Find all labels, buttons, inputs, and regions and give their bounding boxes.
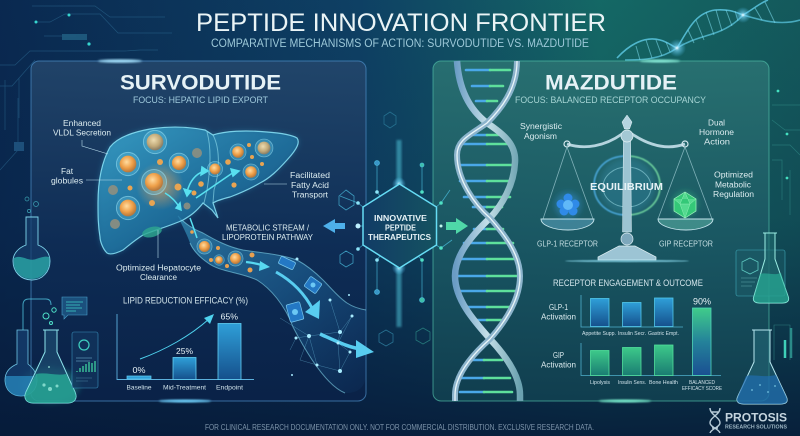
label: enhanced vldl secretion: VLDL Secretion	[53, 128, 111, 138]
logo: protosis research solutions	[710, 408, 788, 433]
hexagon vertical glow	[392, 140, 406, 327]
chart title: LIPID REDUCTION EFFICACY (%)	[123, 296, 248, 306]
glp-1 bar labels: Insulin Secr.	[618, 331, 646, 337]
hepatic inner glow	[136, 162, 184, 210]
label: facilitated fatty acid transport	[264, 171, 330, 200]
stream network nodes	[280, 258, 354, 376]
lower flask	[737, 330, 787, 404]
gallbladder	[141, 225, 163, 239]
glp-1 bar labels: Gastric Empt.	[648, 331, 679, 337]
flask glow	[20, 367, 80, 403]
panel top glow	[640, 60, 680, 62]
label: optimized metabolic regulation: Optimized	[714, 170, 753, 180]
back flask	[5, 330, 37, 396]
panel top glow	[98, 59, 142, 63]
dna rungs	[457, 70, 517, 392]
stream flow arrows	[246, 261, 374, 358]
row label: glp-1 activation: GLP-1	[549, 303, 568, 312]
central hexagon callout: THERAPEUTICS	[368, 232, 431, 242]
transport arrows in liver	[165, 167, 239, 238]
hexagon circuit traces	[339, 112, 452, 346]
text: equilibrium: EQUILIBRIUM	[590, 181, 663, 193]
chart axes	[117, 314, 254, 380]
label: hepatocyte clearance: Clearance	[140, 273, 178, 282]
main title: PEPTIDE INNOVATION FRONTIER	[196, 9, 606, 37]
stream lipoprotein globules	[190, 230, 254, 272]
label: optimized metabolic regulation: Regulation	[713, 190, 754, 199]
bar: endpoint 65%: Endpoint	[216, 384, 243, 392]
balance scale	[541, 115, 713, 262]
label: facilitated fatty acid transport: Facilitated	[290, 171, 330, 180]
bar: mid-treatment 25%: Mid-Treatment	[163, 384, 206, 392]
fat globules	[108, 130, 273, 229]
label: fat globules: globules	[51, 176, 83, 186]
survodutide labels	[51, 119, 330, 282]
bar: mid-treatment 25%	[163, 346, 206, 392]
glp-1 bar labels: Appetite Supp.	[582, 331, 616, 337]
central hexagon callout	[339, 112, 452, 346]
dna strand a	[455, 61, 520, 401]
dna strand b	[455, 61, 520, 401]
label: fat globules: Fat	[61, 167, 74, 176]
logo tagline: RESEARCH SOLUTIONS	[725, 424, 788, 430]
stream receptor cards	[278, 256, 322, 323]
bar: balanced efficacy score 90%: BALANCED	[689, 380, 715, 386]
liver lobe division	[204, 132, 218, 203]
label: hepatocyte clearance	[116, 230, 202, 282]
bar: baseline 0%	[126, 365, 152, 392]
connecting tube	[23, 299, 51, 330]
note screen	[62, 297, 87, 319]
row label: gip activation: Activation	[541, 360, 576, 370]
panel bottom glow	[159, 400, 211, 402]
icon: green gip crystal	[672, 191, 698, 218]
small data bars	[774, 325, 791, 360]
heading: survodutide: SURVODUTIDE	[120, 72, 281, 94]
gip bars	[590, 345, 673, 376]
footer disclaimer: FOR CLINICAL RESEARCH DOCUMENTATION ONLY. NOT FOR COMMERCIAL DISTRIBUTION. EXCLUSIVE RESEARCH DATA.	[205, 423, 594, 432]
circuit decoration top left	[0, 6, 172, 170]
chart title: RECEPTOR ENGAGEMENT & OUTCOME	[553, 278, 703, 288]
label: dual hormone action: Hormone	[699, 128, 735, 137]
label: gip receptor: GIP RECEPTOR	[659, 238, 713, 248]
erlenmeyer flask	[25, 330, 76, 403]
bubbles above round flask	[25, 197, 38, 213]
bar: baseline 0%: Baseline	[126, 384, 152, 392]
liver outer glow	[98, 127, 298, 254]
hexagon shape	[363, 184, 436, 268]
data panel	[736, 250, 785, 296]
round flask	[13, 217, 50, 280]
bar: baseline 0%: 0%	[132, 365, 146, 375]
bar: mid-treatment 25%: 25%	[176, 346, 193, 356]
data tablet	[72, 332, 98, 388]
upper flask	[753, 233, 789, 303]
hexagon text: INNOVATIVE	[374, 213, 427, 223]
gip axes	[581, 343, 721, 376]
label: metabolic stream	[222, 224, 314, 242]
logo wordmark: PROTOSIS	[725, 412, 787, 424]
scale finial	[622, 115, 632, 129]
mazdutide labels	[520, 118, 754, 248]
bubbles	[43, 308, 56, 324]
bar: endpoint 65%	[216, 312, 243, 392]
circuit decoration right	[772, 90, 800, 215]
gip bar labels: Insulin Sens.	[618, 380, 646, 386]
liver illustration	[98, 127, 298, 254]
glp-1 axes	[581, 295, 683, 327]
lab glassware right	[736, 233, 791, 404]
label: facilitated fatty acid transport: Fatty Acid	[291, 181, 329, 190]
label: enhanced vldl secretion: Enhanced	[63, 119, 101, 128]
label: enhanced vldl secretion	[53, 119, 111, 154]
arrow: toward survodutide	[323, 219, 360, 233]
label: hepatocyte clearance: Optimized Hepatocyte	[116, 264, 202, 272]
chart: lipid reduction efficacy	[117, 296, 254, 392]
bar: balanced efficacy score 90%	[682, 296, 722, 392]
logo dna icon	[710, 408, 720, 433]
gip bar labels	[590, 380, 678, 386]
scale beam	[567, 134, 685, 147]
dna highlight	[455, 61, 520, 401]
subheading: receptor focus: FOCUS: BALANCED RECEPTOR OCCUPANCY	[515, 95, 707, 106]
lab glassware left	[5, 197, 98, 403]
metabolic stream	[178, 216, 374, 393]
label: synergistic agonism: Synergistic	[520, 122, 562, 131]
label: metabolic stream: METABOLIC STREAM /	[226, 224, 310, 232]
label: glp-1 receptor: GLP-1 RECEPTOR	[537, 238, 598, 248]
arrow: toward mazdutide	[440, 218, 468, 234]
equilibrium ring	[594, 156, 660, 215]
scale pillar	[622, 132, 632, 232]
panel: mazdutide	[433, 60, 769, 402]
gip bar labels: Bone Health	[649, 380, 678, 386]
label: facilitated fatty acid transport: Transport	[292, 190, 329, 200]
bar: balanced efficacy score 90%: 90%	[693, 296, 711, 306]
heading: mazdutide: MAZDUTIDE	[545, 72, 677, 94]
glp-1 bars	[590, 298, 673, 326]
left pan	[541, 219, 594, 230]
bar: endpoint 65%: 65%	[220, 312, 238, 322]
subheading: hepatic focus: FOCUS: HEPATIC LIPID EXPORT	[133, 95, 268, 106]
main subtitle: COMPARATIVE MECHANISMS OF ACTION: SURVODUTIDE VS. MAZDUTIDE	[211, 38, 589, 50]
central hexagon callout: PEPTIDE	[385, 222, 416, 232]
scale base	[565, 233, 689, 262]
scale chains	[543, 147, 712, 219]
central DNA helix	[455, 61, 520, 401]
label: metabolic stream: LIPOPROTEIN PATHWAY	[222, 233, 314, 242]
label: fat globules	[51, 167, 122, 186]
row label: gip activation: GIP	[553, 351, 564, 360]
glp-1 bar labels	[582, 331, 679, 337]
label: synergistic agonism: Agonism	[524, 132, 557, 141]
panel bottom glow	[599, 400, 651, 402]
panel: survodutide	[31, 59, 366, 403]
chart: receptor engagement and outcome	[541, 278, 722, 392]
right pan	[658, 219, 713, 230]
DNA helix decoration top right	[617, 0, 800, 60]
label: dual hormone action: Action	[704, 138, 730, 146]
label: optimized metabolic regulation: Metabolic	[715, 180, 751, 190]
icon: blue glp-1 molecule	[555, 192, 581, 218]
trend arrow	[140, 314, 214, 359]
gip bar labels: Lipolysis	[590, 380, 610, 386]
row label: glp-1 activation: Activation	[541, 312, 576, 322]
bar: balanced efficacy score 90%: EFFICACY SCORE	[682, 386, 722, 392]
liver body	[98, 127, 298, 254]
label: dual hormone action: Dual	[708, 118, 725, 128]
